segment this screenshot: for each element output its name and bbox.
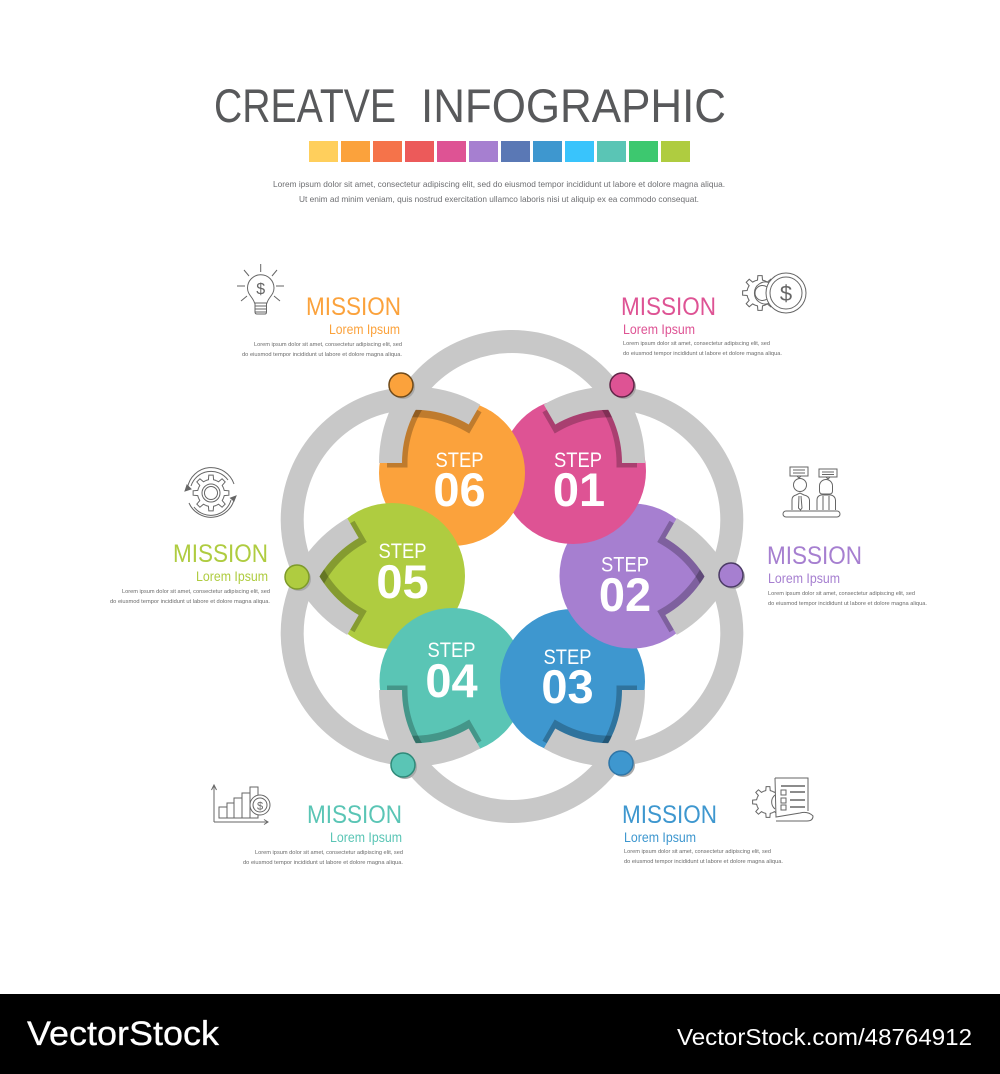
panel: mission 04: MISSION <box>307 801 402 829</box>
title: INFOGRAPHIC <box>421 79 726 132</box>
intro text <box>273 179 725 204</box>
icon: bar chart with coin <box>212 785 270 824</box>
node dots <box>285 373 745 779</box>
panel: mission 03: MISSION <box>622 801 717 829</box>
brand logo: VectorStock <box>27 1015 220 1053</box>
panel: mission 03: do eiusmod tempor incididunt ut labore et dolore magna aliqua. <box>624 859 783 865</box>
title: CREATVE <box>214 79 396 132</box>
flower diagram <box>280 330 745 823</box>
panel: mission 01: do eiusmod tempor incididunt ut labore et dolore magna aliqua. <box>623 351 782 357</box>
icon: light bulb with dollar <box>237 264 284 314</box>
panel: mission 03 <box>622 801 783 865</box>
icon: gear with checklist document <box>753 778 813 821</box>
step 01 label: 01 <box>553 463 605 516</box>
panel: mission 06: do eiusmod tempor incididunt ut labore et dolore magna aliqua. <box>242 352 402 358</box>
panel: mission 04: do eiusmod tempor incididunt ut labore et dolore magna aliqua. <box>243 860 403 866</box>
icon: light bulb with dollar: $ <box>256 281 265 298</box>
panel: mission 06 <box>242 293 402 358</box>
step 02 label: 02 <box>599 568 651 621</box>
step 04 label: STEP <box>428 639 476 662</box>
panel: mission 04 <box>243 801 403 866</box>
panel: mission 05: Lorem ipsum dolor sit amet, consectetur adipiscing elit, sed <box>122 589 270 595</box>
panel: mission 02: Lorem Ipsum <box>768 571 840 586</box>
step 04 label: 04 <box>425 654 478 707</box>
panel: mission 01: MISSION <box>621 293 716 321</box>
icon: bar chart with coin: $ <box>257 800 263 812</box>
step 05 label: 05 <box>376 555 429 608</box>
panel: mission 02: Lorem ipsum dolor sit amet, consectetur adipiscing elit, sed <box>768 591 915 597</box>
step 01 label: STEP <box>554 449 602 472</box>
icon: gear and coin: $ <box>780 281 792 306</box>
grey ring bands <box>248 342 776 812</box>
watermark bar <box>0 994 1000 1074</box>
step discs <box>319 398 704 754</box>
panel: mission 05: Lorem Ipsum <box>196 569 268 584</box>
panel: mission 01: Lorem Ipsum <box>623 322 695 337</box>
step 03 label: 03 <box>541 660 594 713</box>
panel: mission 03: Lorem Ipsum <box>624 830 696 845</box>
panel: mission 01 <box>621 293 782 357</box>
step 02 label: STEP <box>601 554 649 576</box>
watermark bar: VectorStock.com/48764912 <box>677 1024 972 1050</box>
panel: mission 04: Lorem Ipsum <box>330 830 402 845</box>
intro text: Lorem ipsum dolor sit amet, consectetur adipiscing elit, sed do eiusmod tempor incididunt ut labore et dolore magna aliqua. <box>273 179 725 189</box>
step 05 label: STEP <box>378 540 426 563</box>
panel: mission 05: MISSION <box>173 540 268 568</box>
step 06 label: STEP <box>436 449 484 472</box>
panel: mission 01: Lorem ipsum dolor sit amet, consectetur adipiscing elit, sed <box>623 341 770 347</box>
panel: mission 04: Lorem ipsum dolor sit amet, consectetur adipiscing elit, sed <box>255 850 403 856</box>
icon: two people talking <box>783 467 840 517</box>
colour swatch strip <box>309 141 690 162</box>
panel: mission 03: Lorem ipsum dolor sit amet, consectetur adipiscing elit, sed <box>624 849 771 855</box>
panel: mission 06: Lorem ipsum dolor sit amet, consectetur adipiscing elit, sed <box>254 342 402 348</box>
icon: gear and coin <box>743 273 806 313</box>
step 03 label: STEP <box>544 646 592 669</box>
panel: mission 02: do eiusmod tempor incididunt ut labore et dolore magna aliqua. <box>768 601 927 607</box>
intro text: Ut enim ad minim veniam, quis nostrud exercitation ullamco laboris nisi ut aliquip ex ea commodo consequat. <box>299 194 699 204</box>
band shadows <box>320 410 704 744</box>
step 06 label: 06 <box>433 463 486 516</box>
panel: mission 06: Lorem Ipsum <box>329 322 400 337</box>
panel: mission 05 <box>110 540 270 605</box>
icon: gear with cycle arrows <box>185 468 236 517</box>
panel: mission 02 <box>767 542 927 607</box>
panel: mission 05: do eiusmod tempor incididunt ut labore et dolore magna aliqua. <box>110 599 270 605</box>
panel: mission 02: MISSION <box>767 542 862 570</box>
panel: mission 06: MISSION <box>306 293 401 321</box>
